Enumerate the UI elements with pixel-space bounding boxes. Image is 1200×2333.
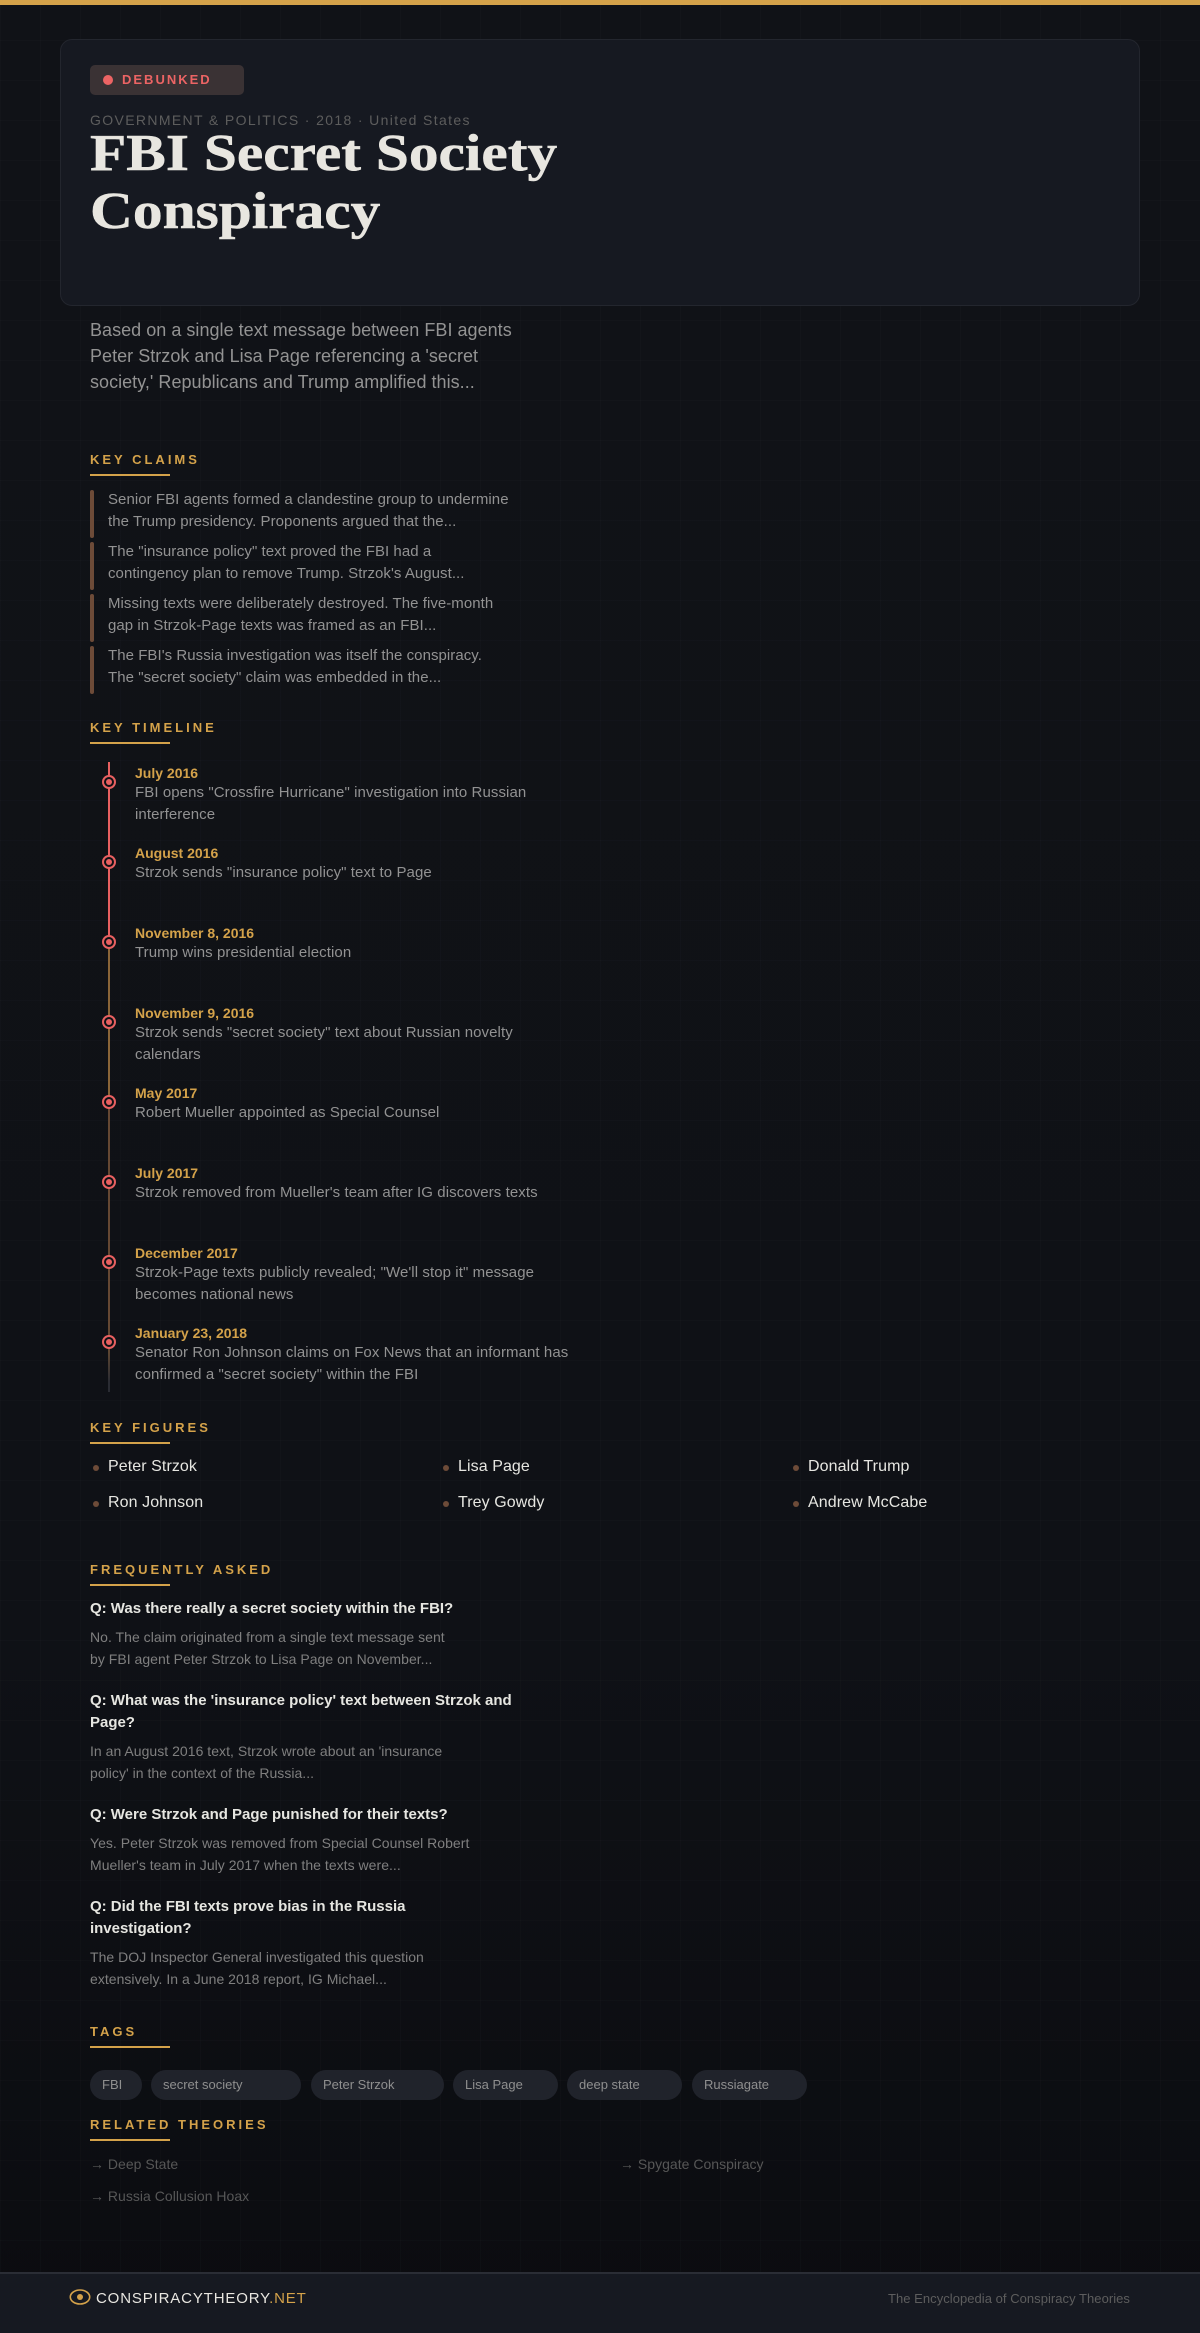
icon: status dot	[103, 75, 113, 85]
title: Conspiracy	[90, 183, 380, 240]
tag list: Russiagate	[704, 2077, 769, 2092]
title: FBI Secret Society	[90, 125, 557, 182]
event: July 2016	[102, 765, 526, 823]
event: November 8, 2016: Trump wins presidential election	[135, 944, 351, 961]
claim 2: contingency plan to remove Trump. Strzok's August...	[108, 565, 464, 582]
event: January 23, 2018: Senator Ron Johnson claims on Fox News that an informant has	[135, 1344, 568, 1361]
question 1: Q: Was there really a secret society within the FBI?	[90, 1600, 453, 1617]
event: August 2016: Strzok sends "insurance policy" text to Page	[135, 864, 432, 881]
event: January 23, 2018: confirmed a "secret society" within the FBI	[135, 1366, 418, 1383]
tag list: Lisa Page	[465, 2077, 523, 2092]
answer 2: In an August 2016 text, Strzok wrote about an 'insurance	[90, 1743, 442, 1759]
heading: key claims: KEY CLAIMS	[90, 452, 200, 467]
claim 2: The "insurance policy" text proved the FBI had a	[108, 543, 431, 560]
answer 3	[90, 1835, 470, 1873]
badge label: DEBUNKED	[122, 72, 212, 87]
logo wordmark: CONSPIRACYTHEORY.NET	[96, 2290, 307, 2307]
intro text: Based on a single text message between FBI agents	[90, 320, 512, 340]
event: August 2016	[102, 845, 432, 881]
event: December 2017: becomes national news	[135, 1286, 293, 1303]
tag list: deep state	[579, 2077, 640, 2092]
icon: eye logo	[70, 2289, 90, 2305]
claim 3	[108, 595, 493, 634]
event: May 2017	[102, 1085, 439, 1121]
heading: related theories: RELATED THEORIES	[90, 2117, 268, 2132]
event: July 2016: interference	[135, 806, 215, 823]
event: November 9, 2016: calendars	[135, 1046, 201, 1063]
answer 4: The DOJ Inspector General investigated this question	[90, 1949, 424, 1965]
event: November 8, 2016	[102, 925, 351, 961]
footer tagline: The Encyclopedia of Conspiracy Theories	[888, 2291, 1130, 2306]
claim 3: gap in Strzok-Page texts was framed as an FBI...	[108, 617, 436, 634]
answer 3: Yes. Peter Strzok was removed from Special Counsel Robert	[90, 1835, 469, 1851]
event: December 2017: Strzok-Page texts publicly revealed; "We'll stop it" message	[135, 1264, 534, 1281]
event: July 2017: Strzok removed from Mueller's team after IG discovers texts	[135, 1184, 538, 1201]
figure: Trey Gowdy: Trey Gowdy	[458, 1494, 544, 1511]
tag list: FBI	[102, 2077, 122, 2092]
event: December 2017	[102, 1245, 534, 1303]
panel: frequently asked	[90, 1562, 512, 1987]
claim 4: The "secret society" claim was embedded in the...	[108, 669, 441, 686]
panel: footer	[0, 2272, 1200, 2333]
intro text: Peter Strzok and Lisa Page referencing a 'secret	[90, 346, 478, 366]
tag list: Peter Strzok	[323, 2077, 395, 2092]
heading: frequently asked: FREQUENTLY ASKED	[90, 1562, 273, 1577]
figure: Peter Strzok: Peter Strzok	[108, 1458, 197, 1475]
badge: debunked	[90, 65, 244, 95]
event: November 9, 2016	[102, 1005, 513, 1063]
intro text: society,' Republicans and Trump amplified this...	[90, 372, 475, 392]
question 4: investigation?	[90, 1920, 192, 1937]
question 3: Q: Were Strzok and Page punished for their texts?	[90, 1806, 448, 1823]
question 4	[90, 1898, 406, 1937]
link: Deep State: → Deep State	[90, 2156, 178, 2172]
event: July 2016: FBI opens "Crossfire Hurricane" investigation into Russian	[135, 784, 526, 801]
panel: key timeline: January 23, 2018	[135, 1325, 247, 1341]
answer 1	[90, 1629, 445, 1667]
event: November 9, 2016: Strzok sends "secret society" text about Russian novelty	[135, 1024, 513, 1041]
category and year line: GOVERNMENT & POLITICS · 2018 · United States	[90, 112, 471, 128]
claim 4: The FBI's Russia investigation was itself the conspiracy.	[108, 647, 482, 664]
intro text	[90, 320, 512, 392]
panel: key claims	[90, 452, 509, 694]
panel: key timeline: July 2017	[135, 1165, 198, 1181]
question 2: Page?	[90, 1714, 135, 1731]
claim 3: Missing texts were deliberately destroyed. The five-month	[108, 595, 493, 612]
claim 4	[108, 647, 482, 686]
panel: related theories	[90, 2117, 764, 2204]
panel: key timeline: November 8, 2016	[135, 925, 254, 941]
question 2	[90, 1692, 512, 1731]
timeline axis	[108, 762, 110, 1392]
panel: key figures	[90, 1420, 927, 1511]
top accent bar	[0, 0, 1200, 5]
heading: key figures: KEY FIGURES	[90, 1420, 211, 1435]
panel: key timeline: July 2016	[135, 765, 198, 781]
claim 1: Senior FBI agents formed a clandestine group to undermine	[108, 491, 509, 508]
figure: Donald Trump: Donald Trump	[808, 1458, 909, 1475]
answer 4	[90, 1949, 424, 1987]
panel: key timeline	[90, 720, 568, 1392]
event: July 2017	[102, 1165, 538, 1201]
claim 2	[108, 543, 464, 582]
question 4: Q: Did the FBI texts prove bias in the Russia	[90, 1898, 405, 1915]
question 2: Q: What was the 'insurance policy' text between Strzok and	[90, 1692, 512, 1709]
tag list	[90, 2070, 807, 2100]
event: May 2017: Robert Mueller appointed as Special Counsel	[135, 1104, 439, 1121]
claim 1	[108, 491, 509, 530]
claim 1: the Trump presidency. Proponents argued that the...	[108, 513, 456, 530]
panel: key timeline: August 2016	[135, 845, 218, 861]
heading: tags: TAGS	[90, 2024, 137, 2039]
panel: key timeline: November 9, 2016	[135, 1005, 254, 1021]
panel: key timeline: May 2017	[135, 1085, 197, 1101]
answer 3: Mueller's team in July 2017 when the texts were...	[90, 1857, 401, 1873]
heading: key timeline: KEY TIMELINE	[90, 720, 217, 735]
tag list: secret society	[163, 2077, 242, 2092]
figure: Ron Johnson: Ron Johnson	[108, 1494, 203, 1511]
title	[90, 125, 557, 240]
figure: Lisa Page: Lisa Page	[458, 1458, 530, 1475]
figure: Andrew McCabe: Andrew McCabe	[808, 1494, 927, 1511]
answer 2: policy' in the context of the Russia...	[90, 1765, 314, 1781]
link: Spygate Conspiracy: → Spygate Conspiracy	[620, 2156, 764, 2172]
link: Russia Collusion Hoax: → Russia Collusion Hoax	[90, 2188, 249, 2204]
answer 1: No. The claim originated from a single text message sent	[90, 1629, 445, 1645]
panel: tags	[90, 2024, 807, 2100]
panel: header card	[60, 39, 1140, 306]
panel: key timeline: December 2017	[135, 1245, 238, 1261]
event: January 23, 2018	[102, 1325, 568, 1383]
answer 1: by FBI agent Peter Strzok to Lisa Page on November...	[90, 1651, 432, 1667]
answer 4: extensively. In a June 2018 report, IG Michael...	[90, 1971, 387, 1987]
answer 2	[90, 1743, 442, 1781]
